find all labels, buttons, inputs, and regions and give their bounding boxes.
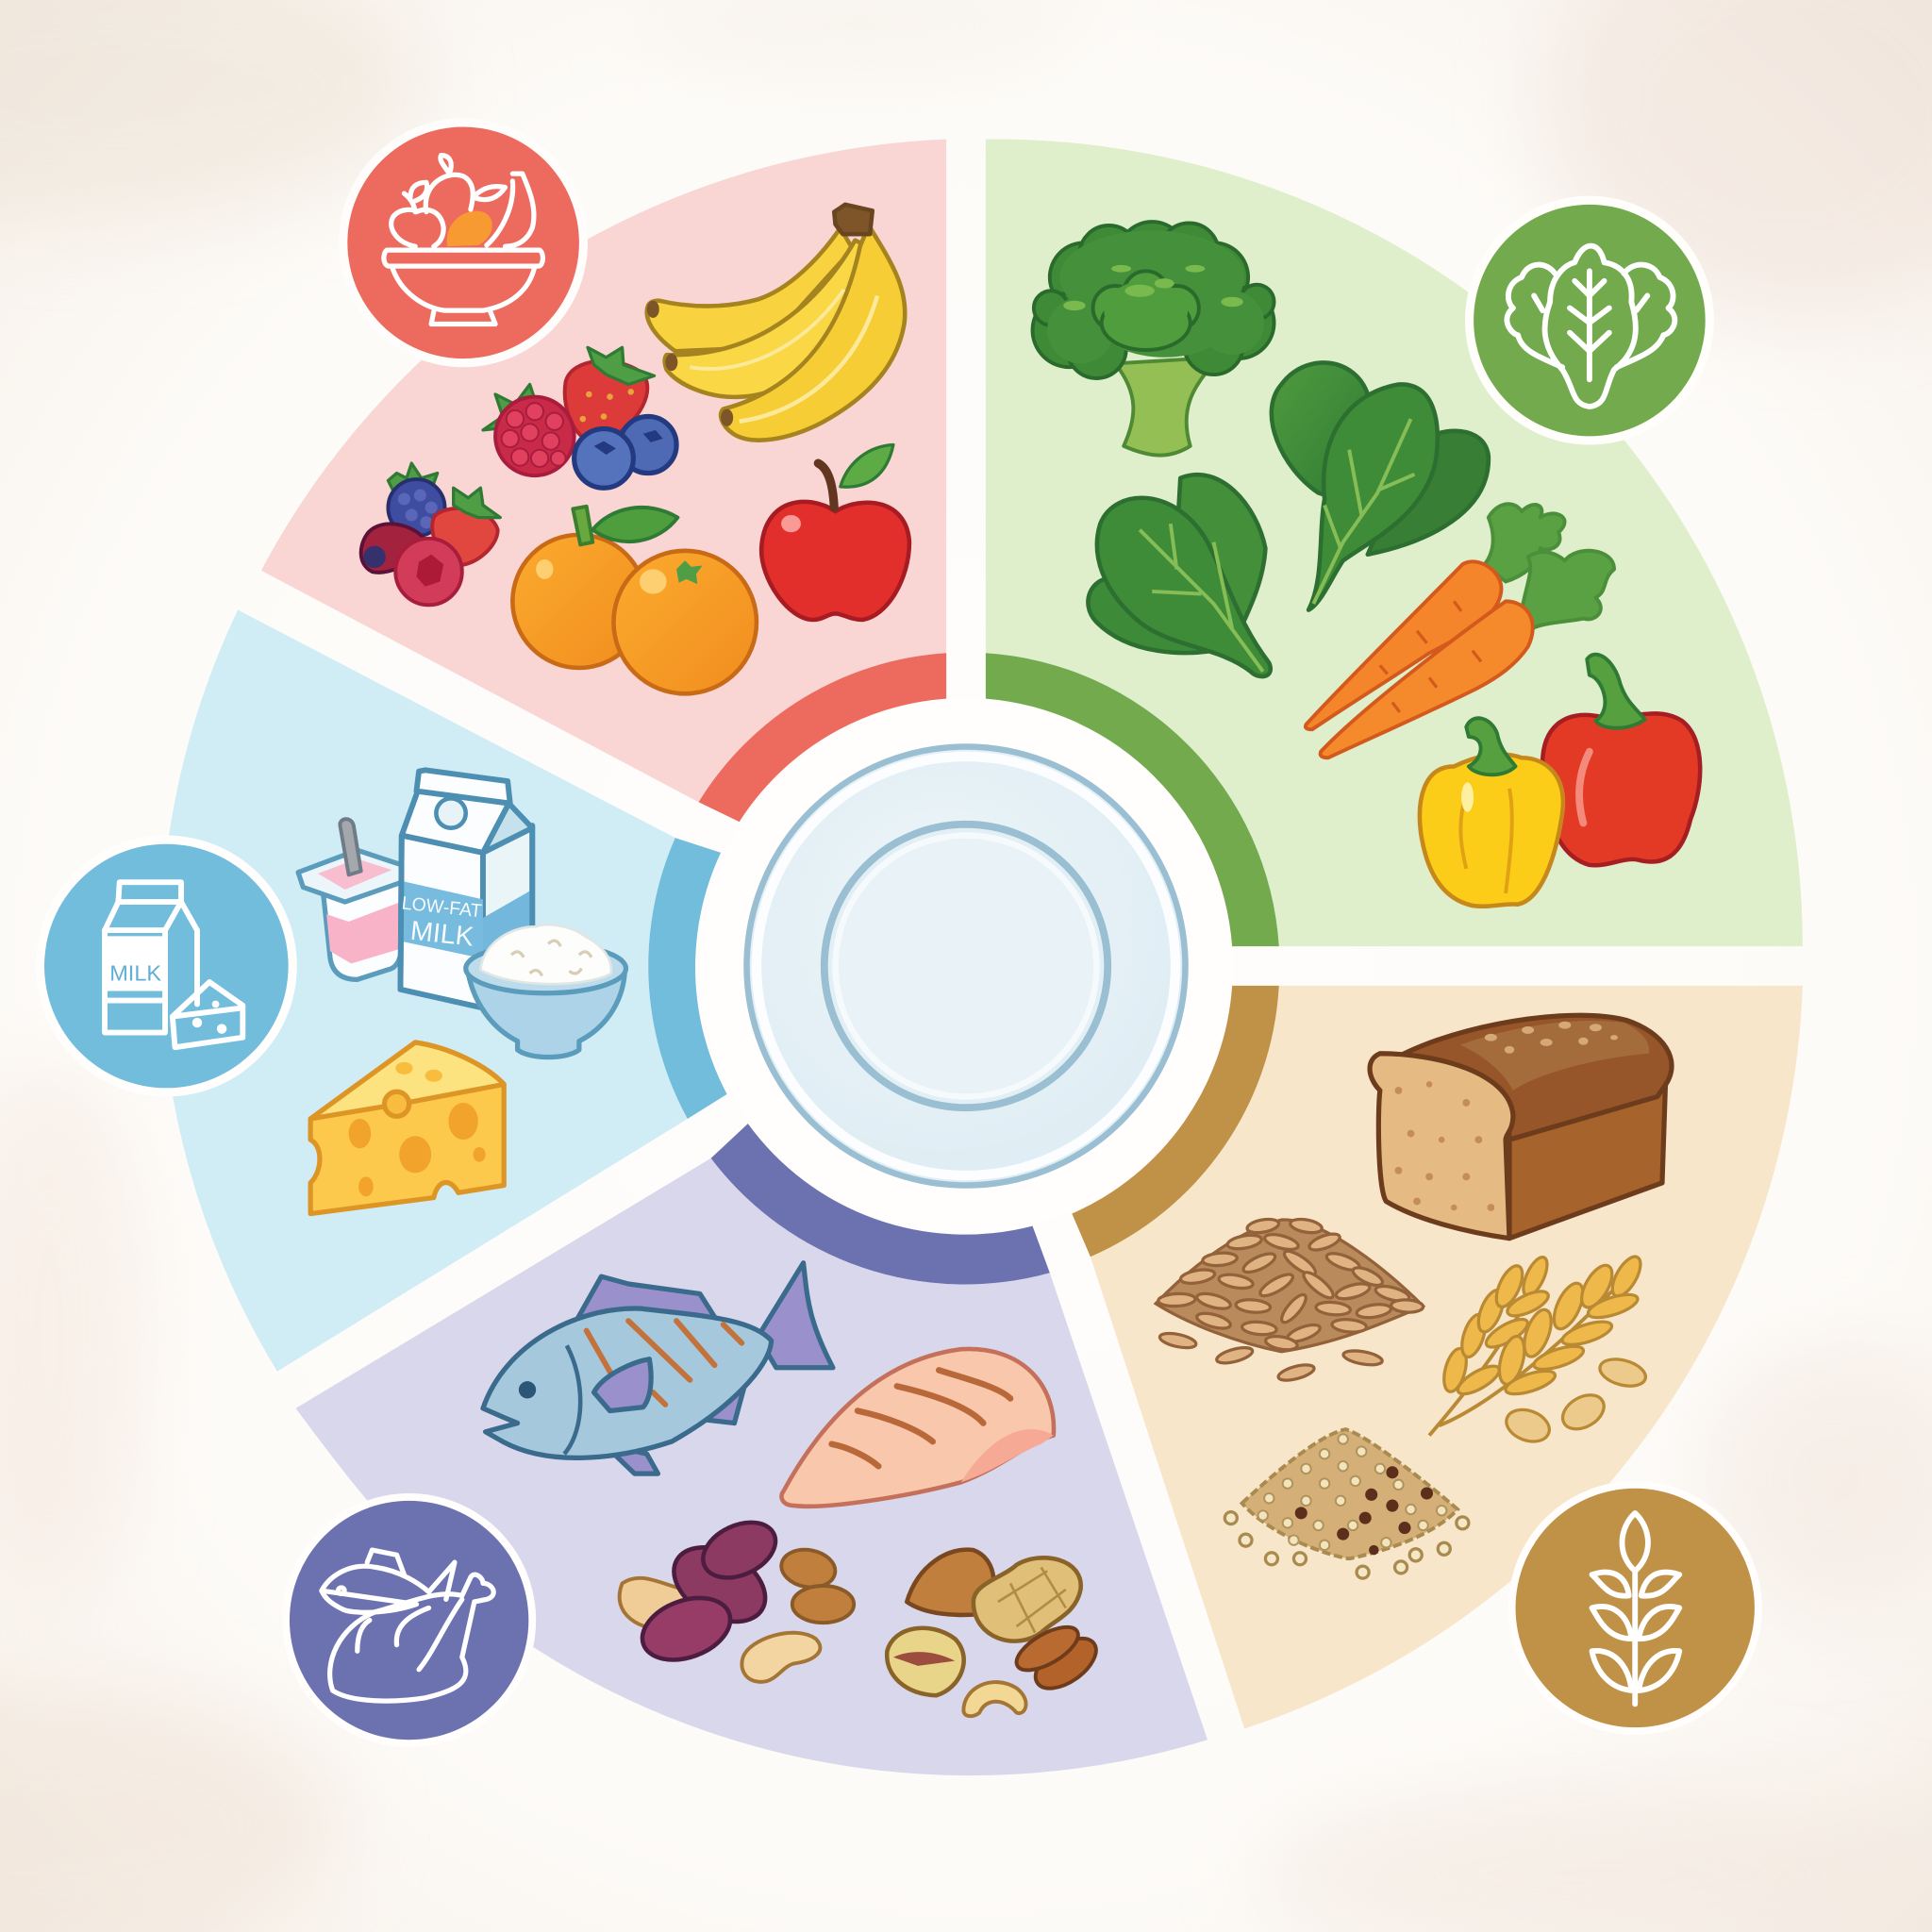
bananas (647, 205, 905, 441)
panel: vegetables (986, 140, 1803, 946)
peppers (1420, 655, 1700, 907)
milk carton (400, 770, 532, 1008)
rice pile (1156, 1217, 1424, 1383)
center plate (700, 700, 1232, 1232)
oranges (512, 507, 757, 693)
fish (483, 1263, 833, 1474)
protein accent ring (711, 1124, 1050, 1285)
panel: protein (295, 1124, 1208, 1775)
carton label: LOW-FAT (401, 892, 483, 922)
broccoli (1033, 222, 1274, 456)
yogurt cup (298, 819, 402, 979)
beans and cashew (620, 1511, 854, 1682)
carrots (1306, 504, 1614, 758)
icon: wheat (1508, 1481, 1762, 1735)
icon: milk and cheese (36, 836, 297, 1096)
grains accent ring (1072, 986, 1279, 1257)
icon: leafy greens (1465, 196, 1714, 445)
icon: fruit bowl (339, 118, 588, 367)
cottage cheese bowl (466, 924, 626, 1058)
mixed nuts (887, 1550, 1105, 1716)
panel: grains (1072, 986, 1803, 1728)
carton label: MILK (409, 916, 475, 953)
quinoa pile (1224, 1429, 1469, 1578)
wheat stalks (1429, 1253, 1649, 1447)
carton label (401, 892, 483, 953)
panel: dairy (160, 610, 727, 1372)
spinach group left (1088, 475, 1271, 676)
bread loaf (1370, 1015, 1672, 1239)
icon label: MILK: MILK (109, 961, 161, 986)
spinach group right (1272, 362, 1489, 610)
fruits accent ring (699, 653, 946, 822)
vegetables accent ring (986, 653, 1279, 946)
cheese wedge (310, 1042, 504, 1214)
chicken breast (781, 1349, 1054, 1507)
berries cluster: mixed (361, 463, 500, 605)
panel: fruits (261, 140, 946, 822)
berries cluster: strawberry raspberry blueberries (483, 347, 676, 488)
dairy accent ring (648, 838, 727, 1119)
apple (761, 445, 909, 620)
icon: fish and poultry (282, 1493, 536, 1747)
